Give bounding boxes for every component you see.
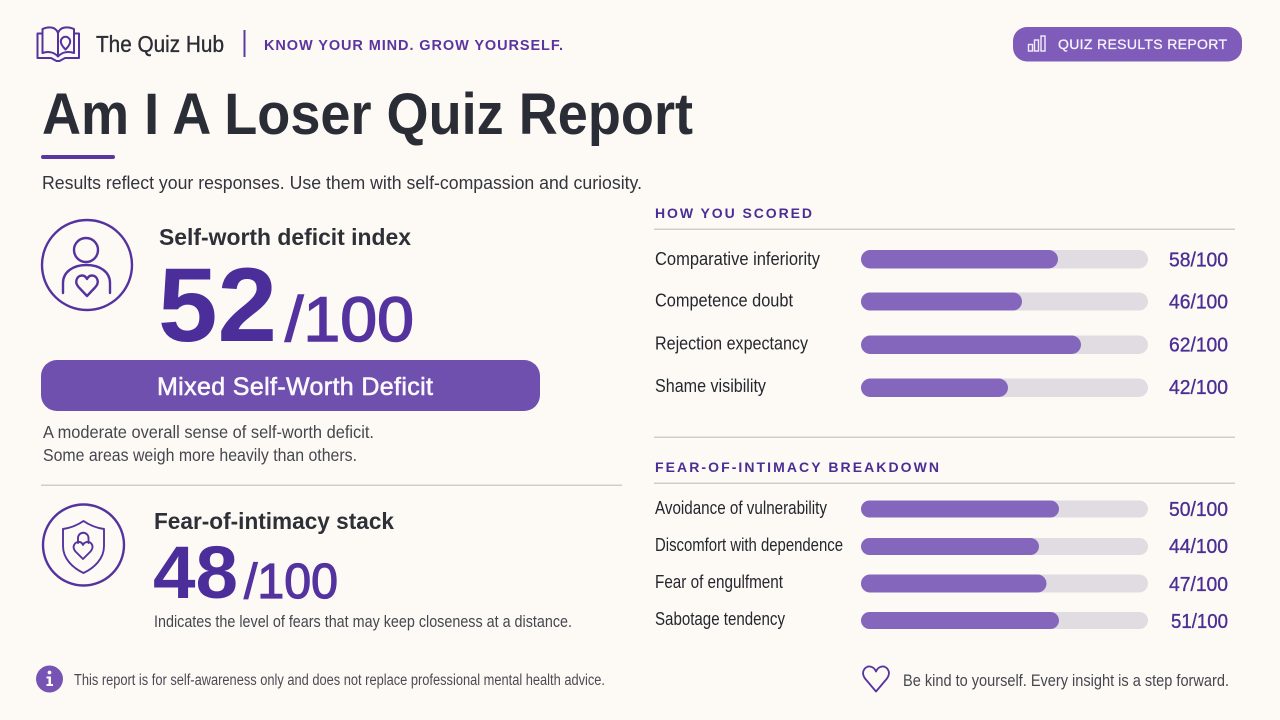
footer disclaimer xyxy=(36,666,605,692)
description: Indicates the level of fears that may keep closeness at a distance. xyxy=(154,613,572,631)
icon: heart outline xyxy=(863,666,889,692)
result band xyxy=(41,360,540,411)
row: competence doubt: Competence doubt xyxy=(655,290,793,310)
icon: bar chart xyxy=(1028,36,1045,51)
metric heading: Fear-of-intimacy stack xyxy=(154,508,395,534)
row: avoidance of vulnerability: 50/100 xyxy=(1169,499,1228,521)
section heading: HOW YOU SCORED xyxy=(655,205,812,221)
row: comparative inferiority: Comparative inferiority xyxy=(655,248,821,269)
row: sabotage tendency: Sabotage tendency xyxy=(655,609,785,629)
footer encouragement xyxy=(863,666,1229,692)
section heading: FEAR-OF-INTIMACY BREAKDOWN xyxy=(655,459,939,475)
description xyxy=(43,422,374,465)
icon: shield with heart lock xyxy=(43,504,124,586)
section: how you scored xyxy=(654,205,1235,399)
panel: self-worth deficit index xyxy=(41,220,540,465)
score: 52 xyxy=(158,247,277,364)
row: comparative inferiority: 58/100 xyxy=(1169,250,1228,272)
brand name: The Quiz Hub xyxy=(96,31,224,57)
row: shame visibility: Shame visibility xyxy=(655,375,767,396)
icon: person with heart xyxy=(42,220,132,310)
row: comparative inferiority xyxy=(655,248,1228,272)
subtitle: Results reflect your responses. Use them with self-compassion and curiosity. xyxy=(42,172,642,193)
result band: Mixed Self-Worth Deficit xyxy=(157,373,433,401)
row: fear of engulfment xyxy=(655,572,1228,596)
score: 48 xyxy=(153,531,238,614)
footer disclaimer: This report is for self-awareness only and does not replace professional mental health advice. xyxy=(74,672,605,689)
row: rejection expectancy: 62/100 xyxy=(1169,334,1228,356)
icon: open book with pin xyxy=(38,27,79,61)
badge: quiz results report xyxy=(1013,27,1242,62)
row: rejection expectancy xyxy=(655,332,1228,356)
panel: fear-of-intimacy stack: /100 xyxy=(244,555,338,609)
row: discomfort with dependence xyxy=(655,535,1228,558)
row: avoidance of vulnerability xyxy=(655,498,1228,521)
row: fear of engulfment: 47/100 xyxy=(1169,574,1228,596)
header brand xyxy=(38,27,563,61)
row: sabotage tendency xyxy=(655,609,1228,633)
row: avoidance of vulnerability: Avoidance of vulnerability xyxy=(655,498,827,518)
row: rejection expectancy: Rejection expectancy xyxy=(655,332,809,354)
row: discomfort with dependence: Discomfort with dependence xyxy=(655,535,843,555)
panel: fear-of-intimacy stack xyxy=(43,504,572,631)
panel: self-worth deficit index: /100 xyxy=(285,285,414,355)
row: sabotage tendency: 51/100 xyxy=(1171,611,1228,633)
row: fear of engulfment: Fear of engulfment xyxy=(655,572,783,592)
description: A moderate overall sense of self-worth deficit. xyxy=(43,422,374,442)
row: shame visibility: 42/100 xyxy=(1169,377,1228,399)
section: fear-of-intimacy breakdown xyxy=(654,459,1235,633)
title: Am I A Loser Quiz Report xyxy=(42,82,693,147)
metric heading: Self-worth deficit index xyxy=(159,224,411,250)
row: competence doubt xyxy=(655,290,1228,314)
description: Some areas weigh more heavily than others. xyxy=(43,445,357,465)
row: competence doubt: 46/100 xyxy=(1169,292,1228,314)
row: shame visibility xyxy=(655,375,1228,399)
tagline: KNOW YOUR MIND. GROW YOURSELF. xyxy=(264,38,563,54)
footer encouragement: Be kind to yourself. Every insight is a step forward. xyxy=(903,671,1229,690)
icon: info xyxy=(36,666,63,692)
badge: quiz results report: QUIZ RESULTS REPORT xyxy=(1058,36,1227,52)
row: discomfort with dependence: 44/100 xyxy=(1169,536,1228,558)
